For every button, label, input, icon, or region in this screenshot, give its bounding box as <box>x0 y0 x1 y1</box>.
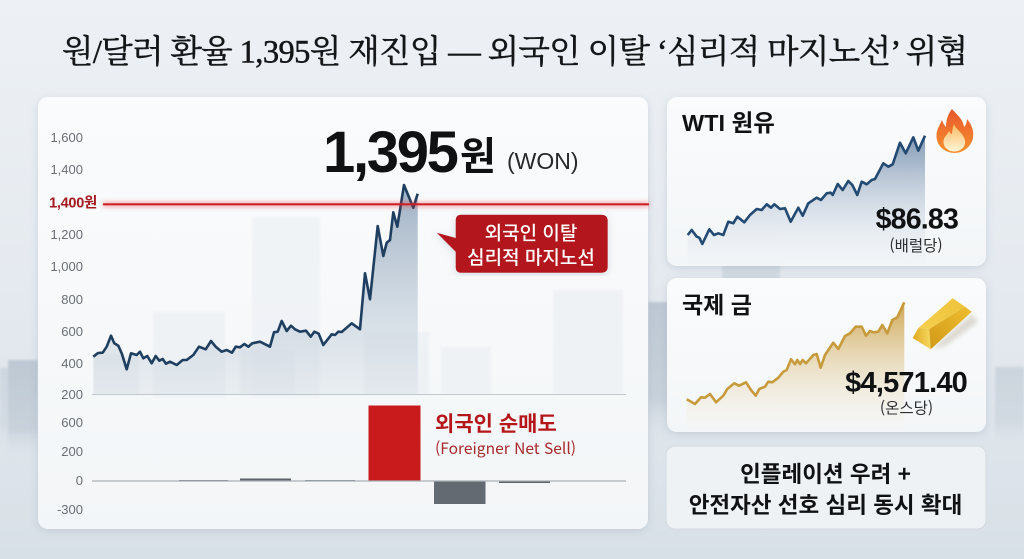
headline value: (WON) <box>507 148 579 174</box>
area chart: oil <box>688 136 925 264</box>
bar chart label <box>435 408 576 459</box>
panel: exchange rate chart <box>38 97 649 529</box>
value: oil price: (배럴당) <box>889 234 943 256</box>
y axis labels <box>50 130 83 517</box>
threshold line: 1,400 won <box>49 194 649 212</box>
faded skyline inside panel <box>94 217 623 397</box>
value: gold price: $4,571.40 <box>845 367 967 399</box>
value: oil price <box>876 204 958 256</box>
y axis labels: 600 <box>61 324 83 339</box>
panel: summary note: 인플레이션 우려 + <box>740 457 911 489</box>
panel: summary note <box>666 446 986 529</box>
heading: WTI 원유 <box>682 110 775 136</box>
y axis labels: 1,400 <box>50 162 83 177</box>
headline value: 원 <box>460 126 496 182</box>
callout: psychological threshold: 심리적 마지노선 <box>467 243 595 270</box>
bar chart: foreigner net sell <box>92 394 626 504</box>
headline value: 1,395 <box>323 120 458 185</box>
y axis labels: 800 <box>61 292 83 307</box>
y axis labels: -300 <box>57 502 83 517</box>
value: gold price: (온스당) <box>880 396 933 418</box>
title: 원/달러 환율 1,395원 재진입 — 외국인 이탈 ‘심리적 마지노선’ 위협 <box>62 34 968 70</box>
panel: gold <box>667 278 986 432</box>
line chart: won/dollar <box>93 185 418 394</box>
value: gold price <box>845 367 967 418</box>
icon: gold bar <box>913 298 978 349</box>
bar chart label: 외국인 순매도 <box>435 408 557 438</box>
y axis labels: 200 <box>61 444 83 459</box>
headline value <box>323 120 579 185</box>
y axis labels: 1,200 <box>50 227 83 242</box>
heading: 국제 금 <box>682 286 752 320</box>
panel: WTI crude <box>667 97 986 266</box>
y axis labels: 200 <box>61 387 83 402</box>
area chart: gold <box>687 302 904 430</box>
value: oil price: $86.83 <box>876 204 958 236</box>
y axis labels: 400 <box>61 356 83 371</box>
icon: flame <box>936 109 973 153</box>
y axis labels: 0 <box>76 473 83 488</box>
y axis labels: 1,000 <box>50 259 83 274</box>
callout: psychological threshold: 외국인 이탈 <box>485 218 577 246</box>
threshold line: 1,400 won: 1,400원 <box>49 194 97 212</box>
callout: psychological threshold <box>437 215 608 273</box>
panel: summary note: 안전자산 선호 심리 동시 확대 <box>689 488 962 520</box>
y axis labels: 1,600 <box>50 130 83 145</box>
bar chart label: (Foreigner Net Sell) <box>435 437 576 459</box>
y axis labels: 600 <box>61 415 83 430</box>
